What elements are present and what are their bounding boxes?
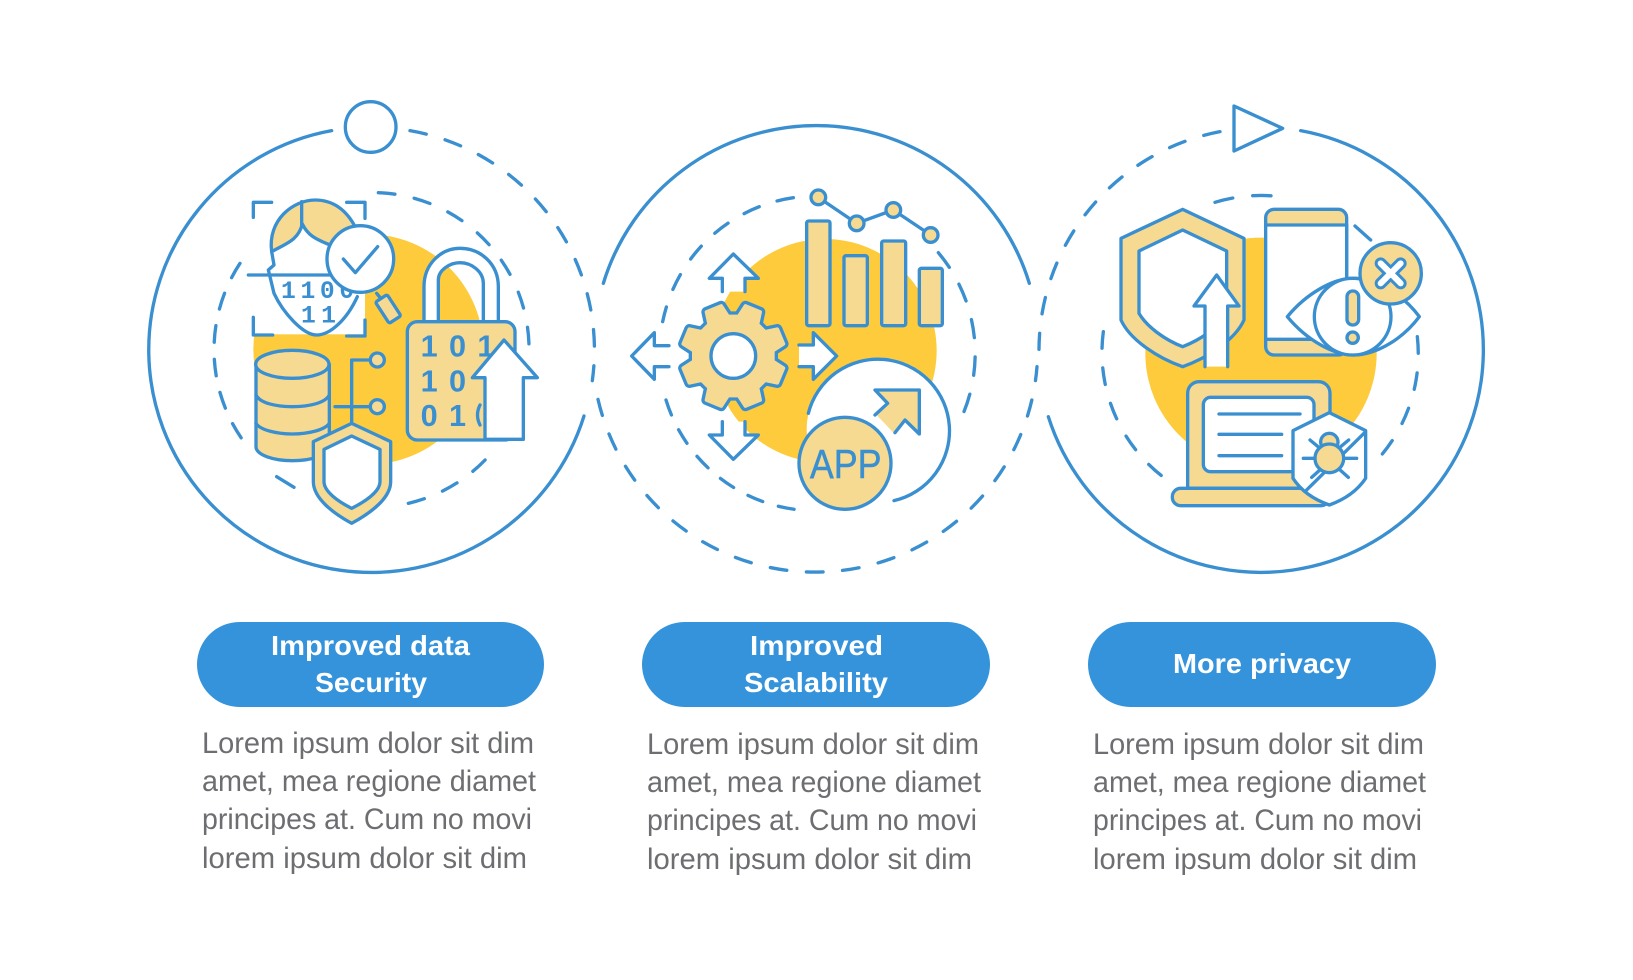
icon: encrypted padlock with up arrow: 10 <box>421 365 477 399</box>
icon: encrypted padlock with up arrow: 101 <box>421 330 506 364</box>
text block: column one: principes at. Cum no movi <box>202 803 532 836</box>
icon: laptop <box>1172 382 1330 506</box>
pill heading: improved data security: Improved data <box>271 630 470 661</box>
arrow: left <box>632 333 669 379</box>
arrow: right <box>799 333 837 379</box>
text block: column three: lorem ipsum dolor sit dim <box>1093 843 1417 876</box>
inner dashed ring <box>1102 195 1418 478</box>
icon: bug shield <box>1293 413 1366 505</box>
text block: column one: amet, mea regione diamet <box>202 765 537 798</box>
icon: shield <box>313 423 391 523</box>
text block: column two: lorem ipsum dolor sit dim <box>647 843 972 876</box>
text block: column one: Lorem ipsum dolor sit dim <box>202 727 534 760</box>
text block: column three: Lorem ipsum dolor sit dim <box>1093 728 1424 761</box>
text block: column three: principes at. Cum no movi <box>1093 804 1422 837</box>
icon: database <box>256 350 329 461</box>
pill heading: improved scalability: Scalability <box>744 667 888 698</box>
pill heading: improved data security: Security <box>315 667 427 698</box>
pill heading: improved scalability: Improved <box>750 630 883 661</box>
text block: column three: amet, mea regione diamet <box>1093 766 1427 799</box>
icon: smartphone <box>1266 209 1347 355</box>
icon: app growth <box>799 358 950 509</box>
panel: more privacy circle <box>1039 106 1483 572</box>
text block: column two: Lorem ipsum dolor sit dim <box>647 728 979 761</box>
inner dashed ring <box>214 193 529 503</box>
icon: shield with arrow <box>1121 209 1244 367</box>
pill heading: improved scalability <box>642 622 990 707</box>
pill heading: more privacy: More privacy <box>1173 648 1351 679</box>
icon: network connectors <box>335 353 384 427</box>
text block: column two <box>647 728 982 876</box>
arrow: down <box>709 422 758 459</box>
icon: face scan: 11 <box>301 302 341 330</box>
end marker triangle <box>1234 106 1283 151</box>
icon: close badge <box>1360 243 1421 304</box>
icon: face scan <box>248 200 401 336</box>
inner dashed ring <box>663 198 975 510</box>
panel: improved data security circle <box>149 102 594 572</box>
text block: column one: lorem ipsum dolor sit dim <box>202 842 527 875</box>
icon: encrypted padlock with up arrow <box>407 248 537 440</box>
icon: encrypted padlock with up arrow: 01 <box>421 399 477 433</box>
pill heading: improved data security <box>197 622 544 707</box>
pill heading: more privacy <box>1088 622 1436 707</box>
icon: app growth: APP <box>810 441 881 487</box>
text block: column three <box>1093 728 1427 876</box>
text block: column two: amet, mea regione diamet <box>647 766 982 799</box>
icon: trend line <box>811 190 938 242</box>
yellow background blob <box>253 234 483 464</box>
icon: bar chart <box>807 221 942 326</box>
text block: column one <box>202 727 537 875</box>
outer ring <box>149 131 594 572</box>
arrow: up <box>709 254 758 292</box>
outer ring <box>598 126 1037 572</box>
yellow background blob <box>1145 238 1377 469</box>
outer ring <box>1039 131 1483 572</box>
start marker circle <box>345 102 396 152</box>
icon: gear <box>683 306 784 406</box>
yellow background blob <box>713 239 937 462</box>
icon: face scan: 1100 <box>281 278 359 306</box>
text block: column two: principes at. Cum no movi <box>647 804 977 837</box>
icon: eye with alert <box>1287 278 1419 355</box>
panel: improved scalability circle <box>598 126 1037 572</box>
